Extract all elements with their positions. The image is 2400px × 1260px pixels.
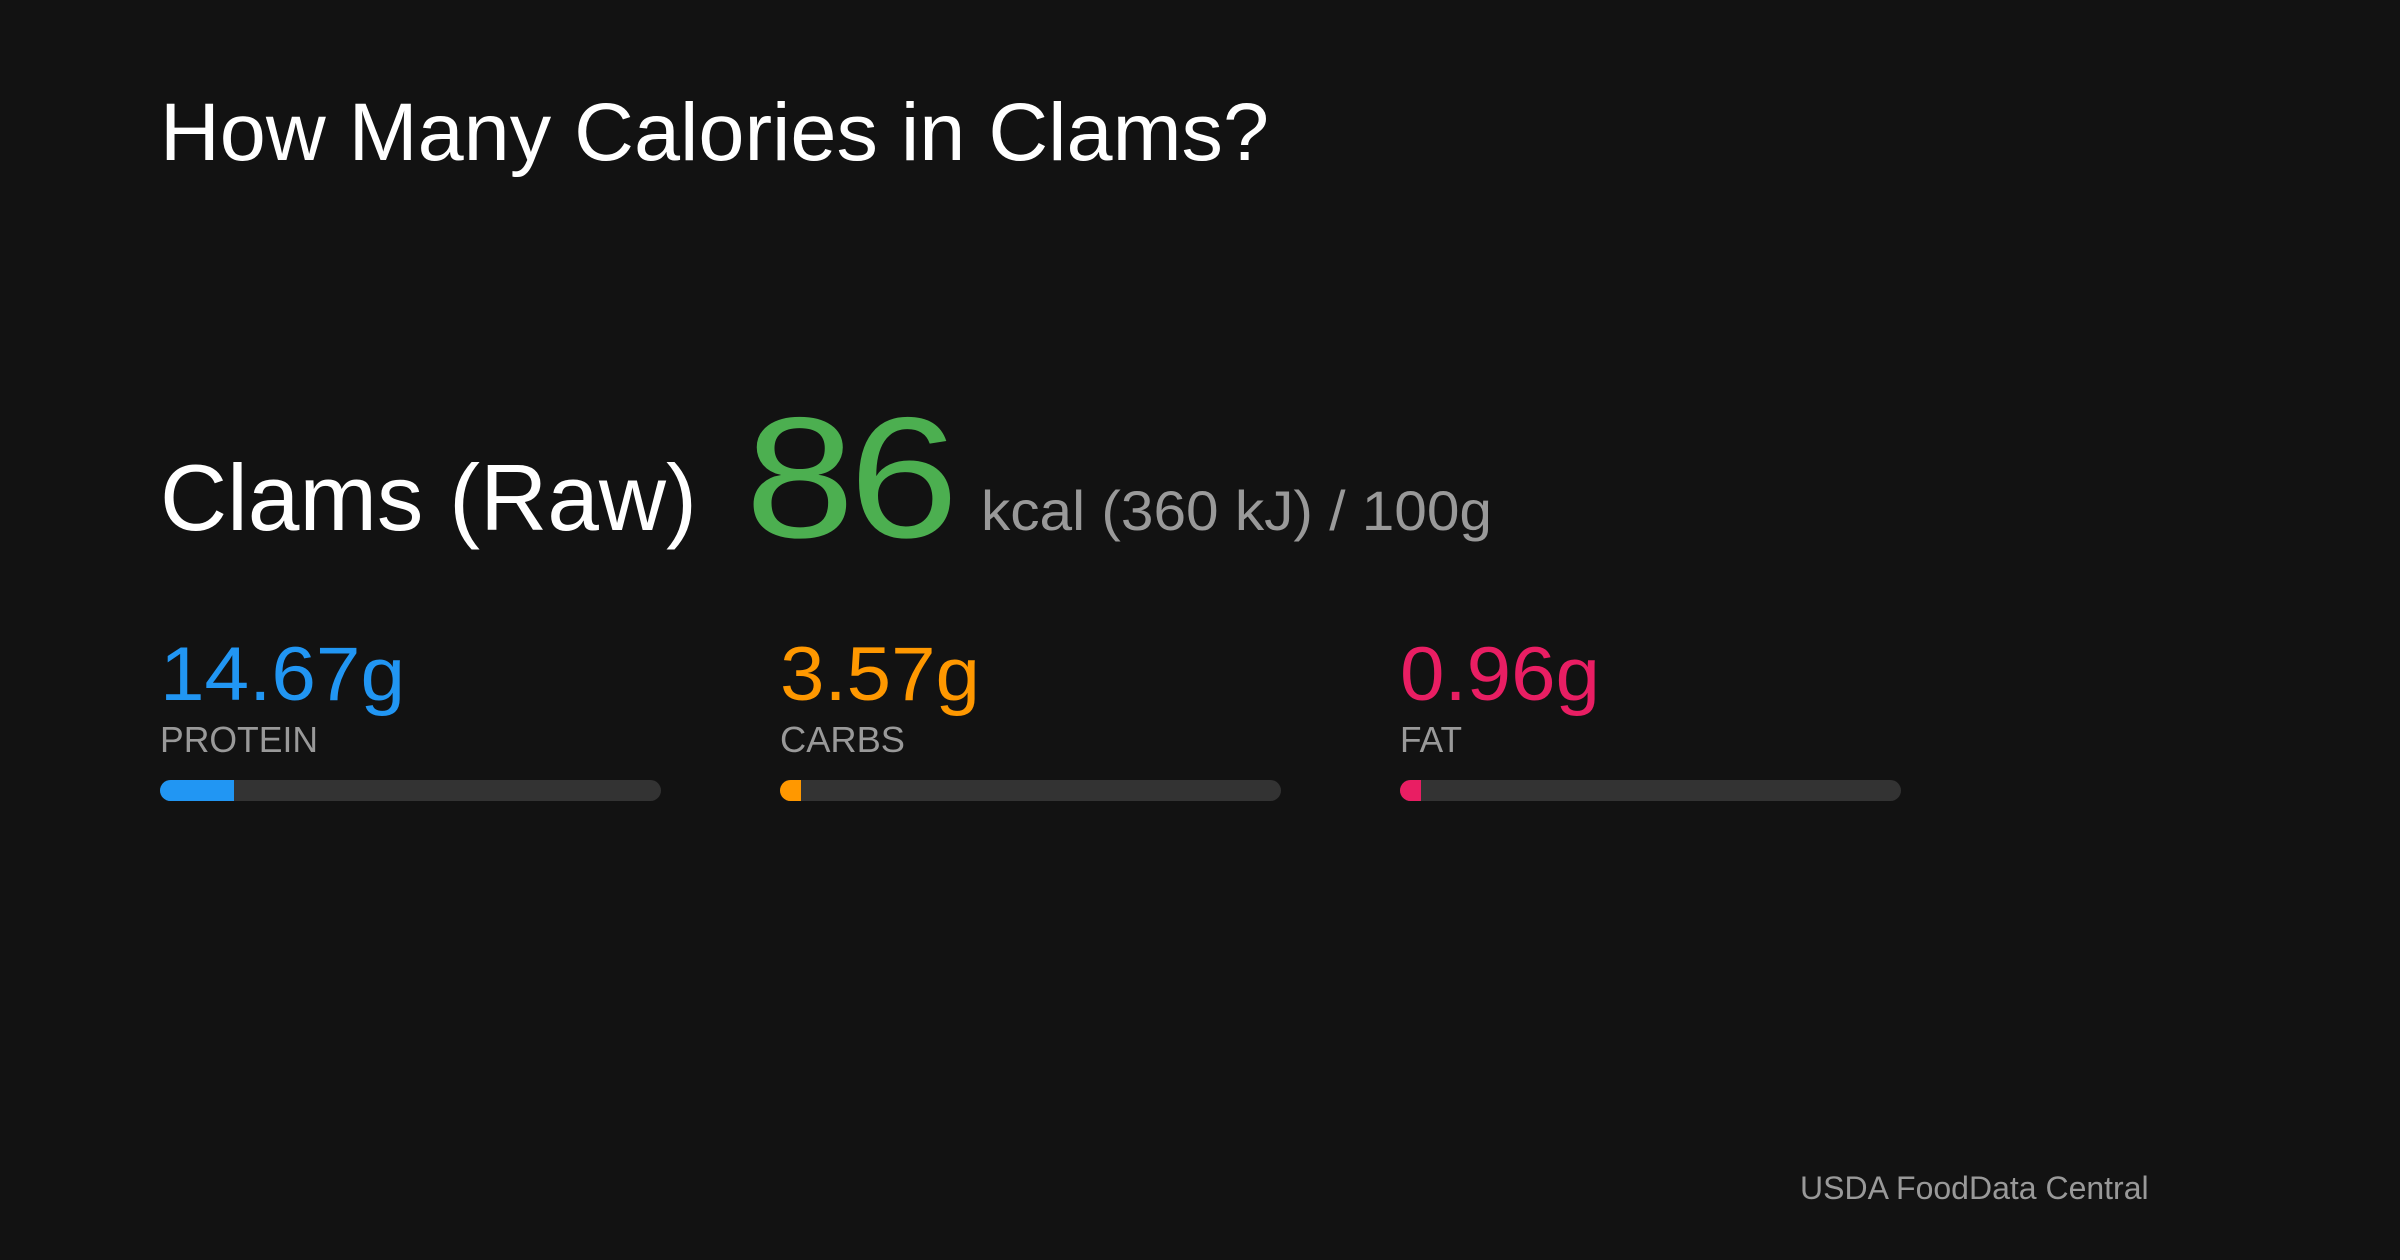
food name: Clams (Raw) (160, 445, 697, 550)
panel: fat (1400, 632, 1901, 801)
panel: protein (160, 632, 661, 801)
panel: carbs (780, 632, 1281, 801)
fat bar (1400, 780, 1901, 801)
protein bar (160, 780, 661, 801)
carbs bar (780, 780, 1281, 801)
source credit: USDA FoodData Central (1800, 1170, 2149, 1206)
calorie unit: kcal (360 kJ) / 100g (981, 479, 1492, 542)
carbs label: CARBS (780, 719, 905, 760)
fat amount: 0.96g (1400, 632, 1600, 717)
calorie value: 86 (745, 382, 953, 574)
protein amount: 14.67g (160, 632, 405, 717)
title: How Many Calories in Clams? (160, 87, 1269, 178)
carbs amount: 3.57g (780, 632, 980, 717)
protein label: PROTEIN (160, 719, 318, 760)
fat label: FAT (1400, 719, 1462, 760)
